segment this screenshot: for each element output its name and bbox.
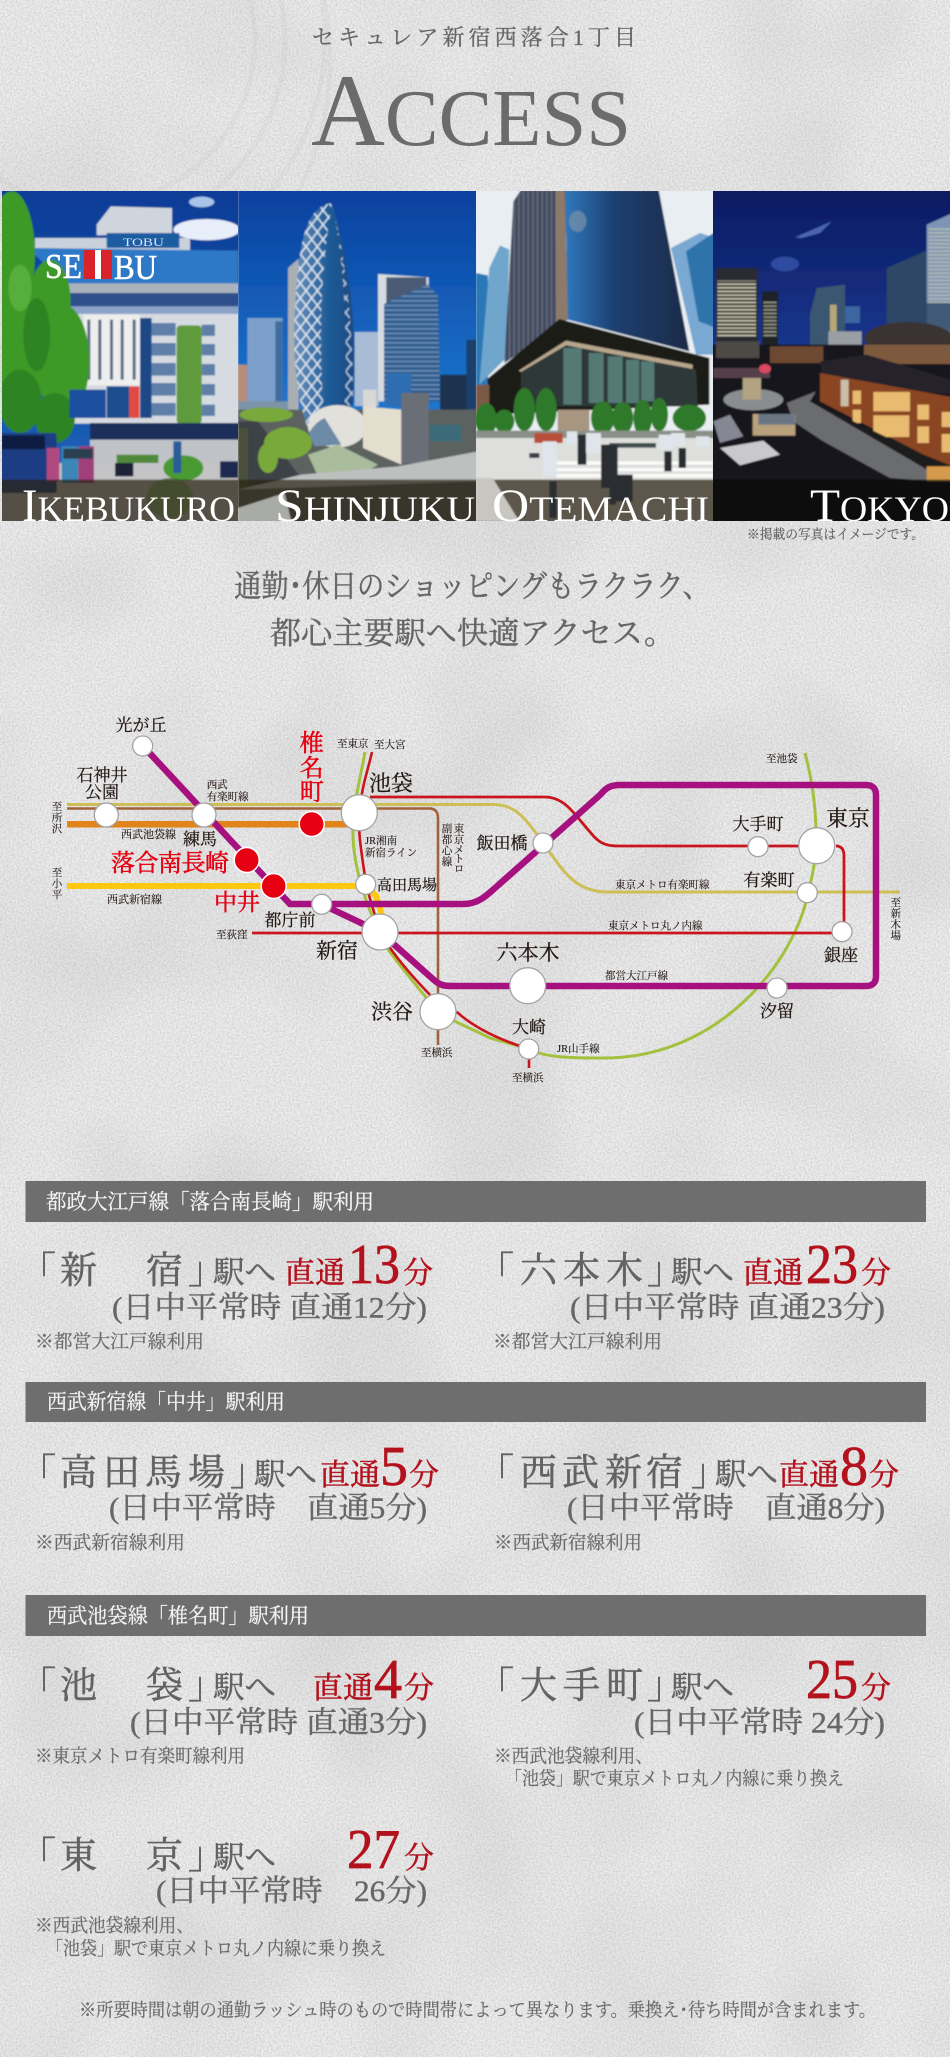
route: Shinjuku: ※都営大江戸線利用 [35,1332,204,1353]
route: Seibu Shinjuku: 駅へ [714,1457,778,1492]
line and direction labels: 西武 [207,778,228,791]
station labels: 石神井 [76,766,128,785]
caption: Shinjuku: SHINJUKU [275,480,475,532]
route: Shinjuku: (日中平常時 直通12分) [112,1292,427,1324]
station labels: 飯田橋 [476,834,528,853]
route: Takadanobaba [19,1436,439,1554]
photo disclaimer: ※掲載の写真はイメージです。 [747,526,924,542]
sign: TOBU: TOBU [123,235,164,249]
line and direction labels [52,737,901,1084]
station labels: 高田馬場 [377,876,437,894]
route: Roppongi: 23 [806,1234,858,1296]
header bar: Oedo line: 都政大江戸線「落合南長崎」駅利用 [46,1190,374,1214]
route: Seibu Shinjuku: 「西武新宿」 [477,1452,728,1494]
route: Takadanobaba: 分 [409,1459,439,1492]
route: Takadanobaba: ※西武新宿線利用 [35,1533,185,1554]
line and direction labels: 至大宮 [374,738,406,751]
photo: Shinjuku [238,188,478,528]
sign: SEIBU: BU [114,248,157,287]
route: Shinjuku [19,1234,433,1353]
route: Seibu Shinjuku: 直通 [779,1459,839,1492]
route: Tokyo: 駅へ [212,1840,276,1875]
line and direction labels: 都営大江戸線 [605,969,668,982]
route: Seibu Shinjuku: 8 [840,1436,868,1498]
line and direction labels: 至所沢 [52,801,63,835]
station labels: 汐留 [760,1002,794,1021]
footnote: ※所要時間は朝の通勤ラッシュ時のもので時間帯によって異なります。乗換え･待ち時間が含まれます。 [79,2000,876,2022]
caption: Ikebukuro: IKEBUKURO [22,480,235,532]
route: Otemachi [477,1649,891,1790]
route: Ikebukuro: 直通 [313,1672,373,1705]
route: Otemachi: 「池袋」駅で東京メトロ丸ノ内線に乗り換え [505,1768,844,1790]
route: Takadanobaba: (日中平常時 直通5分) [109,1492,427,1525]
line: Fukutoshin [67,808,438,1045]
station labels: 有楽町 [744,871,794,890]
station labels: 公園 [85,783,119,802]
line and direction labels: 西武池袋線 [121,827,176,841]
route: Ikebukuro: 4 [374,1649,402,1711]
route: Roppongi: (日中平常時 直通23分) [570,1292,885,1324]
route: Takadanobaba: 駅へ [253,1457,317,1492]
route: Otemachi: (日中平常時 24分) [634,1706,885,1740]
route: Otemachi: 「大手町」 [477,1666,684,1707]
header bar: Seibu Shinjuku line [26,1382,926,1422]
route: Ikebukuro: ※東京メトロ有楽町線利用 [35,1746,245,1768]
station labels: 練馬 [183,830,217,849]
line: JR Shonan-Shinjuku [359,752,529,1068]
line and direction labels: 至小平 [52,867,63,901]
route: Roppongi: 駅へ [670,1255,734,1290]
line and direction labels: 至横浜 [512,1071,544,1084]
route: Tokyo: ※西武池袋線利用、 [35,1916,194,1937]
photo: Tokyo [710,188,950,528]
stations [94,736,852,1059]
route: Shinjuku: 駅へ [212,1255,276,1290]
line and direction labels: 有楽町線 [207,790,249,803]
route: Shinjuku: 分 [403,1257,433,1290]
station labels: 銀座 [824,946,858,965]
route: Ikebukuro: (日中平常時 直通3分) [130,1706,427,1740]
line: Seibu Shinjuku [67,886,382,915]
line and direction labels: 至横浜 [421,1046,453,1059]
route: Seibu Shinjuku: ※西武新宿線利用 [494,1533,642,1554]
route: Ikebukuro [19,1649,434,1768]
heading: ACCESS: ACCESS [311,54,631,168]
line: Seibu Yurakucho / Yurakucho [67,804,900,892]
photo: Otemachi [475,188,716,528]
line and direction labels: 至東京 [337,737,369,750]
line: Seibu Ikebukuro [67,821,359,828]
route: Seibu Shinjuku: (日中平常時 直通8分) [567,1492,885,1525]
line and direction labels: 西武新宿線 [107,892,162,906]
route: Otemachi: 駅へ [670,1670,734,1705]
route: Shinjuku: 13 [348,1234,400,1296]
lead copy [234,569,710,651]
route: Roppongi: 分 [861,1257,891,1290]
route: Seibu Shinjuku: 分 [869,1459,899,1492]
header bar: Seibu Ikebukuro line: 西武池袋線「椎名町」駅利用 [47,1604,309,1628]
caption: Tokyo: TOKYO [810,480,949,532]
route: Tokyo: 「池袋」駅で東京メトロ丸ノ内線に乗り換え [46,1938,386,1960]
lead copy: 通勤･休日のショッピングもラクラク、 [234,569,710,604]
route: Roppongi: 直通 [743,1257,803,1290]
station labels: 六本木 [496,941,560,965]
route: Takadanobaba: 直通 [320,1459,380,1492]
route: Ikebukuro: 分 [404,1672,434,1705]
nearby station labels: 落合南長崎 [111,850,229,877]
route: Tokyo: 「東京」 [19,1835,225,1877]
line and direction labels: 至池袋 [766,752,798,765]
route: Tokyo [19,1819,434,1960]
route: Otemachi: 25 [806,1649,858,1711]
line and direction labels: 副都心線 [442,822,454,868]
station labels: 渋谷 [371,1000,413,1024]
line and direction labels: 東京メトロ [454,822,465,875]
line: JR Yamanote [353,752,816,1058]
header bar: Oedo line [26,1181,926,1222]
photo: Ikebukuro [0,188,240,528]
route: Tokyo: (日中平常時 26分) [156,1875,427,1908]
header bar: Seibu Ikebukuro line [26,1595,926,1636]
line and direction labels: 東京メトロ有楽町線 [615,878,710,891]
route: Otemachi: ※西武池袋線利用、 [494,1746,653,1768]
sign: SEIBU [46,250,157,280]
route: Shinjuku: 「新宿」 [19,1250,225,1292]
route: Ikebukuro: 「池袋」 [19,1665,225,1707]
lead copy: 都心主要駅へ快適アクセス。 [270,616,675,651]
route: Shinjuku: 直通 [285,1257,345,1290]
nearby station labels: 中井 [214,890,260,915]
line and direction labels: 東京メトロ丸ノ内線 [608,919,703,932]
title: project name: セキュレア新宿西落合1丁目 [312,25,636,50]
line and direction labels: JR湘南 [365,834,397,847]
station labels: 大手町 [732,815,784,834]
line and direction labels: 至荻窪 [216,928,248,941]
station labels: 池袋 [369,771,413,796]
route: Tokyo: 27 [347,1819,400,1881]
route: Tokyo: 分 [404,1842,434,1875]
stations: nearby highlighted [234,812,324,898]
route: Takadanobaba: 「高田馬場」 [19,1452,267,1494]
station labels: 大崎 [512,1018,546,1037]
line and direction labels: JR山手線 [557,1042,600,1055]
line: Toei Oedo [143,746,876,986]
nearby station labels: 椎名町 [300,730,324,806]
line and direction labels: 新宿ライン [365,846,417,859]
nearby station labels [111,730,324,915]
caption: Otemachi: OTEMACHI [492,480,709,532]
station labels: 光が丘 [116,716,166,735]
route: Ikebukuro: 駅へ [212,1670,276,1705]
route: Otemachi: 分 [861,1672,891,1705]
station labels: 新宿 [316,939,358,963]
route: Roppongi: ※都営大江戸線利用 [493,1332,662,1353]
route map [52,716,901,1084]
station labels [76,716,870,1037]
station labels: 東京 [826,806,870,831]
sign: SEIBU: SE [45,247,82,286]
station labels: 都庁前 [264,911,316,930]
line and direction labels: 至新木場 [890,897,901,942]
route: Roppongi: 「六本木」 [477,1250,684,1292]
route: Roppongi [477,1234,891,1353]
route: Seibu Shinjuku [477,1436,899,1554]
line: Marunouchi [252,797,844,933]
route: Takadanobaba: 5 [380,1436,408,1498]
header bar: Seibu Shinjuku line: 西武新宿線「中井」駅利用 [47,1390,285,1414]
